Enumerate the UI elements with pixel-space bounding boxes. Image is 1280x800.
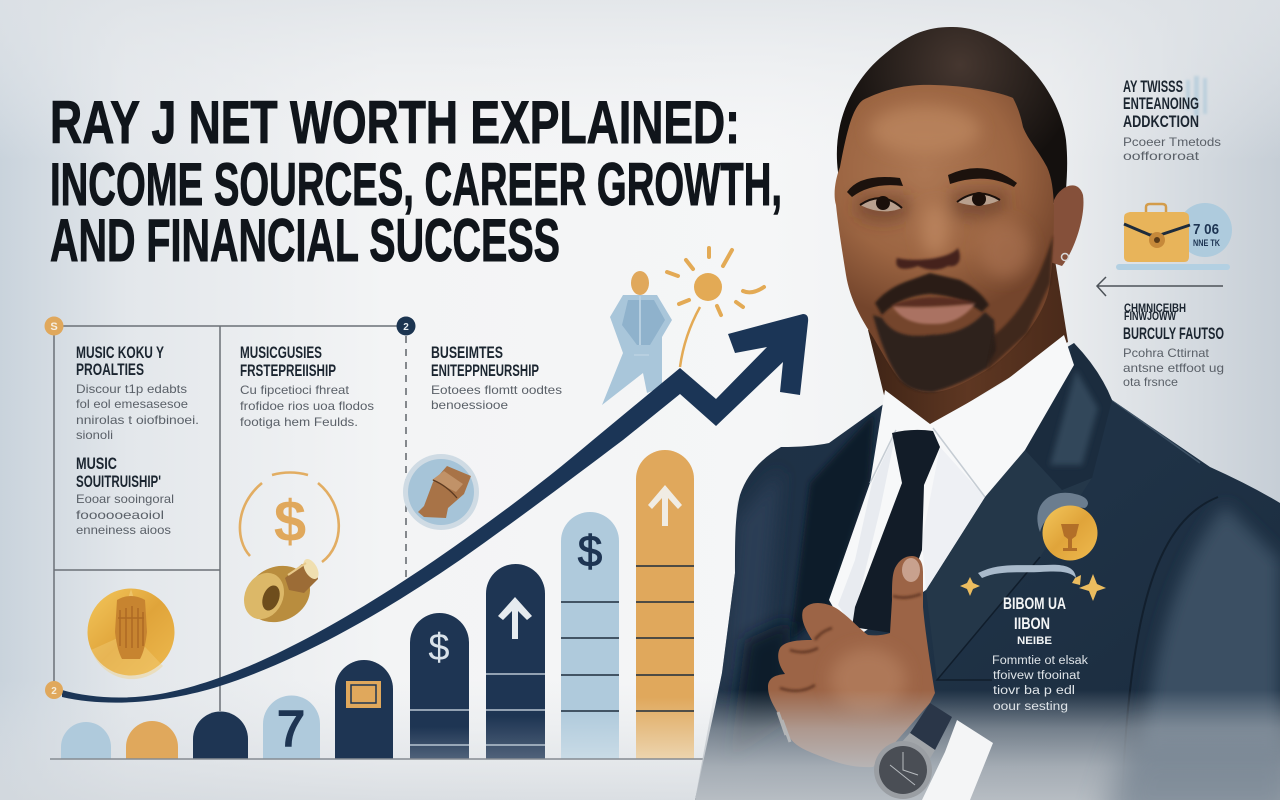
- bar icon: gold up arrow: [648, 485, 682, 526]
- suit jacket: [695, 343, 1280, 800]
- nose: [896, 248, 960, 270]
- text block: music royalties: PROALTIES: [76, 360, 144, 379]
- badge: top-right number: 2: [403, 322, 409, 333]
- text block: music businesses: FRSTEPREIISHIP: [240, 361, 336, 380]
- text block: music businesses: [240, 343, 374, 429]
- bar icon: seven: 7: [277, 701, 305, 757]
- wristwatch: [874, 703, 952, 799]
- bar icon: dollar outline: $: [428, 627, 450, 669]
- shirt: [829, 335, 1074, 640]
- text block: music royalties: sionoli: [76, 428, 113, 442]
- text block: music sponsorship: Eooar sooingoral: [76, 492, 174, 506]
- text block: on-suit caption: [992, 594, 1088, 713]
- portrait: man in suit: [695, 27, 1280, 800]
- text block: on-suit caption: oour sesting: [993, 701, 1068, 713]
- text block: right lower: Pcohra Cttirnat: [1123, 346, 1210, 360]
- head: [835, 27, 1083, 392]
- title: [50, 89, 782, 274]
- badge: top-left dollar: [44, 316, 64, 336]
- right lapel: [926, 343, 1112, 680]
- text block: music royalties: nnirolas t oiofbinoei.: [76, 413, 199, 427]
- text block: music sponsorship: enneiness aioos: [76, 523, 171, 537]
- title: INCOME SOURCES, CAREER GROWTH,: [50, 151, 782, 218]
- eyes: [860, 192, 1000, 211]
- shirt cuff: [922, 720, 993, 800]
- text block: right lower: FINWJOWW: [1124, 309, 1176, 323]
- badge: curve start: 2: [51, 686, 57, 697]
- neck: [868, 260, 1068, 426]
- icon: gold medal with trophy: [1037, 493, 1098, 560]
- text block: on-suit caption: tiovr ba p edl: [993, 685, 1075, 697]
- bar divider lines: [410, 566, 694, 745]
- text block: top right: ooffororoat: [1123, 149, 1200, 163]
- bar icon: navy dollar: $: [578, 527, 602, 576]
- text block: business entrepreneurship: ENITEPPNEURSHIP: [431, 361, 539, 380]
- text block: music royalties: Discour t1p edabts: [76, 382, 187, 396]
- text block: music royalties: fol eol emesasesoe: [76, 397, 188, 411]
- text block: music sponsorship: foooooeaoiol: [76, 508, 164, 522]
- text block: music businesses: Cu fipcetioci fhreat: [240, 383, 350, 397]
- icon: gold briefcase with badge: [1116, 203, 1232, 270]
- text block: right lower: BURCULY FAUTSO: [1123, 324, 1224, 343]
- hair: [837, 27, 1067, 205]
- text block: business entrepreneurship: BUSEIMTES: [431, 343, 503, 362]
- necktie: [852, 430, 940, 633]
- baseline: [50, 758, 703, 760]
- icon: coin with music figure: [88, 588, 174, 679]
- text block: music sponsorship: [76, 454, 174, 537]
- icon: dollar ring: [240, 472, 339, 562]
- panel frame: income source grid: [54, 326, 406, 711]
- text block: music royalties: [76, 343, 199, 442]
- bar icon: gold square: [346, 681, 381, 708]
- growth arrow: [62, 314, 808, 703]
- badge: curve start: [45, 681, 63, 699]
- bar icon: white up arrow: [498, 597, 532, 639]
- text block: music sponsorship: MUSIC: [76, 454, 117, 473]
- title: AND FINANCIAL SUCCESS: [50, 207, 560, 274]
- text block: top right: ADDKCTION: [1123, 112, 1199, 131]
- eyebrows: [847, 177, 903, 197]
- text block: music businesses: frofidoe rios uoa flodos: [240, 399, 374, 413]
- mouth: [890, 297, 977, 324]
- bar chart: rising columns: [50, 450, 703, 759]
- badge: top-right number: [396, 316, 416, 336]
- icon: gold briefcase with badge: 7 06: [1193, 221, 1219, 238]
- jaw stubble: [987, 235, 1053, 370]
- face: [835, 85, 1054, 392]
- icon: dollar ring: $: [274, 489, 306, 554]
- icon: figure silhouette: [602, 271, 672, 405]
- mustache: [875, 273, 989, 315]
- text block: right lower: CHMNICEIBH: [1124, 301, 1186, 315]
- goatee: [873, 312, 996, 392]
- text block: right lower: [1123, 301, 1224, 389]
- text block: top right: Pcoeer Tmetods: [1123, 135, 1221, 149]
- text block: music royalties: MUSIC KOKU Y: [76, 343, 164, 362]
- arrow: pointing left: [1097, 277, 1223, 296]
- text block: business entrepreneurship: Eotoees flomtt oodtes: [431, 383, 562, 397]
- icon: gold bag: [237, 556, 322, 632]
- text block: right lower: antsne etffoot ug: [1123, 361, 1224, 375]
- text block: music sponsorship: SOUITRUISHIP': [76, 472, 161, 491]
- text block: business entrepreneurship: [431, 343, 562, 412]
- title: RAY J NET WORTH EXPLAINED:: [50, 89, 740, 156]
- bottom fade: [695, 690, 1280, 800]
- earring: [1062, 254, 1068, 260]
- text block: business entrepreneurship: benoessiooe: [431, 398, 508, 412]
- text block: on-suit caption: NEIBE: [1017, 635, 1052, 647]
- text block: on-suit caption: IIBON: [1014, 614, 1050, 633]
- icon: ribbon and stars: [960, 565, 1106, 601]
- text block: top right: ENTEANOING: [1123, 94, 1199, 113]
- text block: music businesses: footiga hem Feulds.: [240, 415, 358, 429]
- face shading: [856, 106, 1031, 278]
- badge: top-left dollar: S: [50, 321, 58, 333]
- icon: gold briefcase with badge: NNE TK: [1193, 238, 1220, 248]
- text block: on-suit caption: Fommtie ot elsak: [992, 655, 1088, 667]
- text block: music businesses: MUSICGUSIES: [240, 343, 322, 362]
- text block: top right: AY TWISSS: [1123, 77, 1183, 96]
- icon: sun with rays: [667, 248, 764, 367]
- text block: on-suit caption: BIBOM UA: [1003, 594, 1066, 613]
- text block: top right: [1123, 76, 1221, 163]
- hand: [768, 556, 935, 767]
- text block: on-suit caption: tfoivew tfooinat: [993, 670, 1081, 682]
- sleeve shadow under fade: [1100, 740, 1280, 800]
- icon: brown box in blue circle: [403, 454, 479, 530]
- text block: right lower: ota frsnce: [1123, 375, 1178, 389]
- ear: [1050, 185, 1083, 266]
